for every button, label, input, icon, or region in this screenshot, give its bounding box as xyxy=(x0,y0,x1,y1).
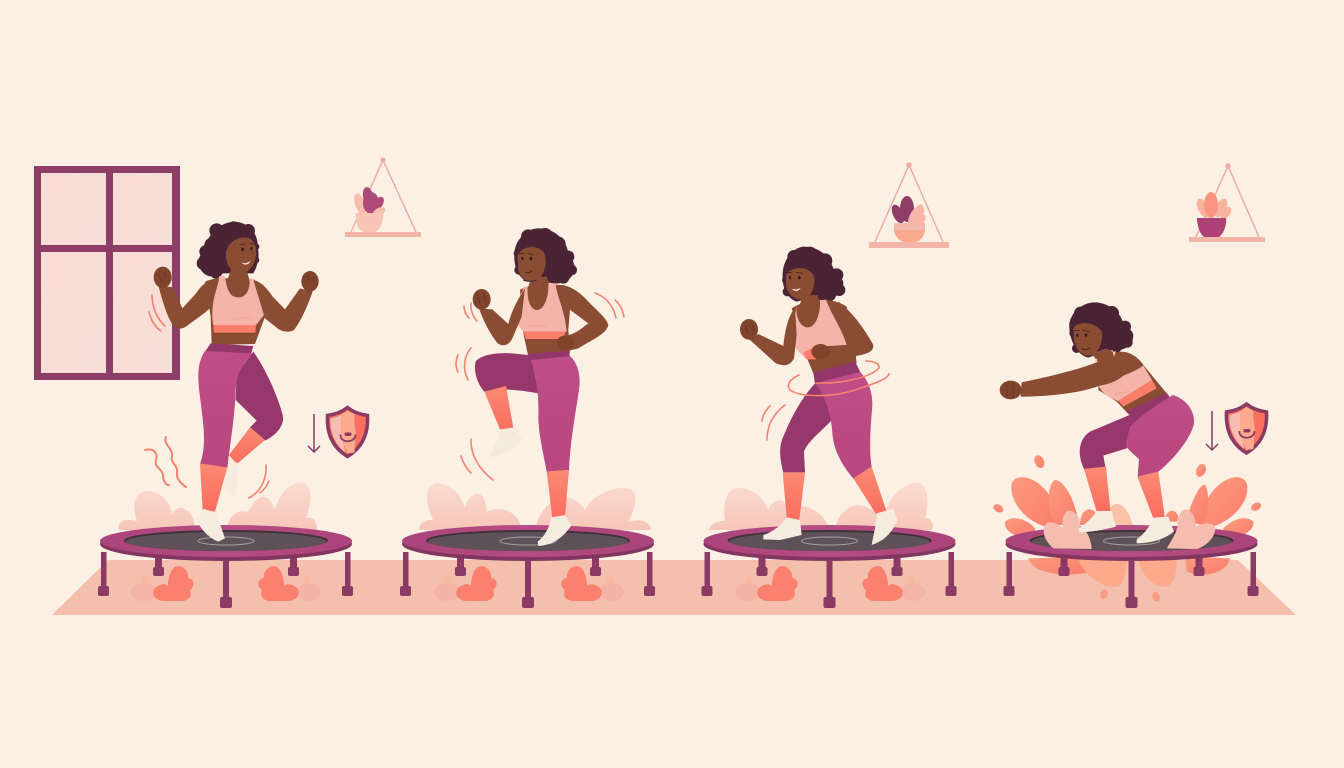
bushes behind trampoline 3 xyxy=(709,483,933,530)
shield icon 1 xyxy=(327,408,368,456)
fists xyxy=(154,267,319,292)
arms xyxy=(479,285,608,352)
arms xyxy=(1021,357,1131,397)
bushes behind trampoline 2 xyxy=(419,483,651,530)
floor flowers 1 xyxy=(131,566,321,601)
torso xyxy=(205,268,265,345)
hair xyxy=(1069,302,1133,358)
front leg xyxy=(197,343,253,542)
standing leg xyxy=(528,351,580,546)
motion lines figure 1 xyxy=(149,295,269,498)
arms xyxy=(749,302,873,365)
fists xyxy=(1000,381,1022,399)
window xyxy=(34,166,180,380)
figure 3: twist xyxy=(740,247,897,545)
floor flowers 3 xyxy=(735,566,925,601)
back leg xyxy=(223,352,283,497)
trampoline 4 xyxy=(1004,525,1258,608)
figure 4: squat xyxy=(1000,302,1194,543)
fist xyxy=(473,289,574,350)
motion lines figure 2 xyxy=(456,293,624,480)
arrow down 2 xyxy=(1206,411,1218,450)
back thigh and shin xyxy=(1078,413,1142,532)
shelf with plant 1 xyxy=(345,158,421,237)
arrow down 1 xyxy=(308,414,320,452)
hair xyxy=(197,221,259,279)
back leg xyxy=(763,383,833,540)
face xyxy=(1073,323,1102,356)
motion lines figure 3 xyxy=(762,405,785,440)
torso xyxy=(1092,348,1167,416)
fist xyxy=(740,319,830,359)
pale front petals on trampoline 4 xyxy=(1044,509,1215,549)
face xyxy=(786,268,814,300)
bushes behind trampoline 1 xyxy=(119,482,317,530)
trampoline 2 xyxy=(400,525,655,608)
face xyxy=(517,247,546,282)
figure 2: high knee march xyxy=(473,228,608,546)
flower burst behind trampoline 4 xyxy=(992,454,1262,603)
hoop rings around waist xyxy=(788,361,889,396)
squiggle lines xyxy=(145,437,186,487)
trampoline 1 xyxy=(98,525,353,608)
torso xyxy=(514,277,572,357)
raised leg xyxy=(475,353,539,458)
figure 1: jumping with raised knee xyxy=(154,221,319,542)
floor mat xyxy=(52,560,1296,615)
shelf with plant 3 xyxy=(1189,163,1265,242)
front thigh and shin xyxy=(1126,393,1194,543)
front leg xyxy=(813,362,897,545)
floor flowers 2 xyxy=(434,566,624,601)
face xyxy=(226,237,256,273)
arms xyxy=(158,278,313,332)
hair xyxy=(782,247,845,302)
shelf with plant 2 xyxy=(869,162,949,248)
trampoline 3 xyxy=(702,525,956,608)
hair xyxy=(514,228,577,284)
torso xyxy=(791,295,857,373)
shield icon 2 xyxy=(1226,404,1267,453)
